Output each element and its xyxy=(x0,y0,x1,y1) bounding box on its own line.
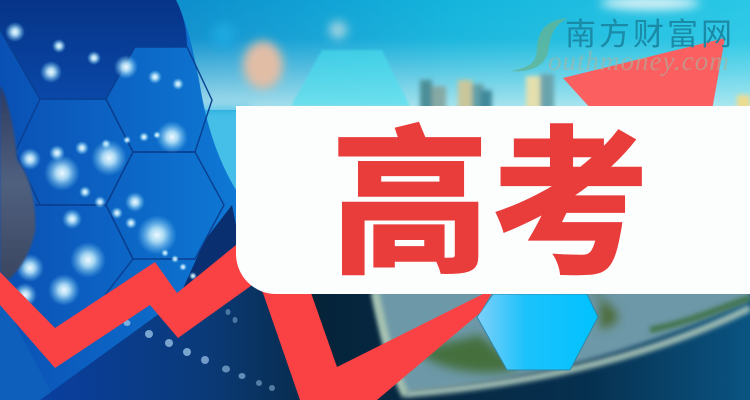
logo: Southmoney xyxy=(511,17,735,76)
background: blue hexagon field xyxy=(0,0,340,400)
person silhouette xyxy=(0,85,35,280)
pale hexagon in sky xyxy=(291,50,410,106)
red arrowhead xyxy=(563,38,725,110)
white title banner xyxy=(236,106,750,294)
logo Chinese name: 南方财富网 xyxy=(565,17,735,52)
logo English name: outhmoney.com xyxy=(548,46,730,76)
background: sea and island xyxy=(280,290,750,400)
logo S mark xyxy=(511,18,568,71)
glowing light dots xyxy=(5,22,275,391)
cyan hexagon xyxy=(477,294,598,370)
red rising arrow line xyxy=(0,245,495,400)
title: 高考 xyxy=(330,115,650,294)
